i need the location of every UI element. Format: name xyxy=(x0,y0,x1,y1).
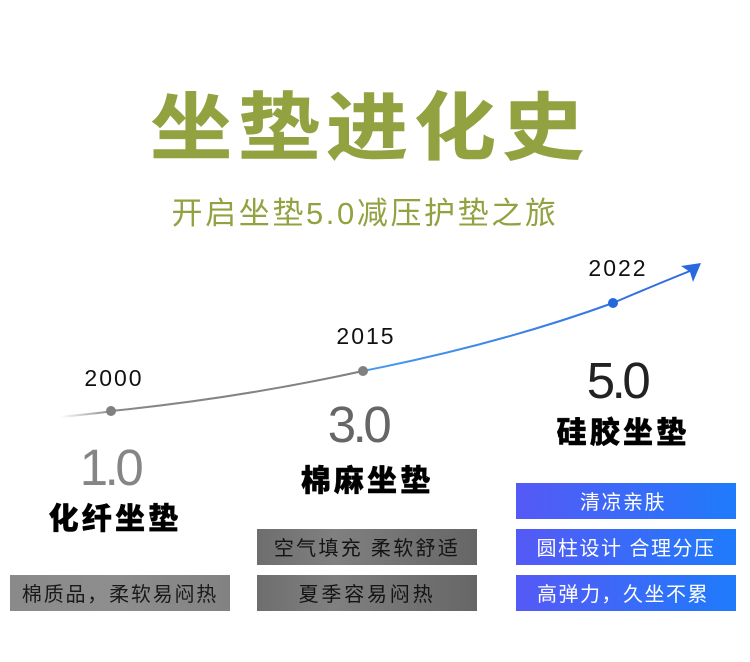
name: 化纤坐垫: 化纤坐垫 xyxy=(49,494,181,538)
bar: 棉质品: 棉质品，柔软易闷热 xyxy=(22,584,218,606)
version 3.0: 3.0 xyxy=(328,396,388,453)
bar: 空气填充: 空气填充 柔软舒适 xyxy=(274,538,460,560)
bar: 清凉亲肤 xyxy=(516,483,736,519)
title: 坐垫进化史 xyxy=(150,68,590,175)
bar: 夏季 xyxy=(257,575,477,611)
bar: 圆柱设计 xyxy=(516,529,736,565)
bar: 高弹力: 高弹力，久坐不累 xyxy=(537,584,709,606)
bar: 空气填充 xyxy=(257,529,477,565)
point: 2022 xyxy=(608,298,618,308)
bar: 高弹力 xyxy=(516,575,736,611)
name: 棉麻坐垫: 棉麻坐垫 xyxy=(301,456,433,500)
bar: 清凉亲肤: 清凉亲肤 xyxy=(580,492,666,514)
bar: 圆柱设计: 圆柱设计 合理分压 xyxy=(536,538,716,560)
version 1.0: 1.0 xyxy=(80,439,140,496)
version 5.0: 5.0 xyxy=(587,352,647,409)
point: 2015 xyxy=(358,366,368,376)
point: 2000 xyxy=(106,406,116,416)
year 2022: 2022 xyxy=(588,255,648,281)
subtitle: 开启坐垫5.0减压护垫之旅 xyxy=(172,196,558,231)
arrowhead xyxy=(681,263,701,282)
bar: 夏季: 夏季容易闷热 xyxy=(299,584,435,606)
bar: 棉质品 xyxy=(10,575,230,611)
year 2015: 2015 xyxy=(336,323,396,349)
year 2000: 2000 xyxy=(84,365,144,391)
name: 硅胶坐垫: 硅胶坐垫 xyxy=(557,408,689,452)
